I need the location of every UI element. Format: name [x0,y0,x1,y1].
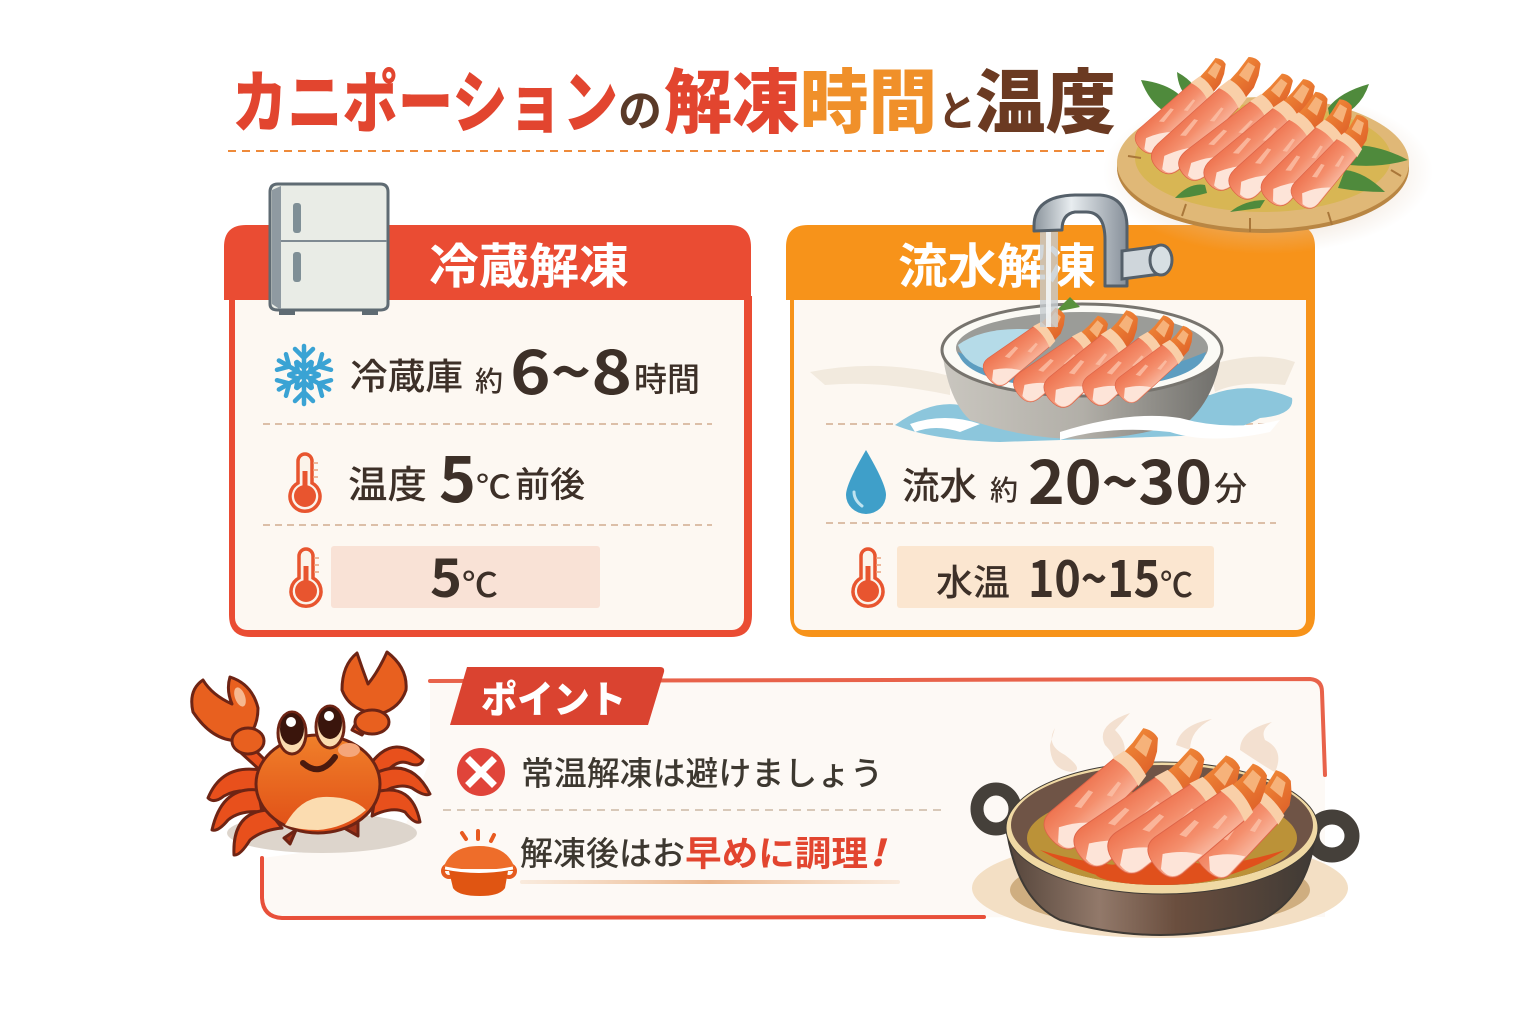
title [232,47,1116,148]
row: refrigerator time: 冷蔵庫 [350,348,463,400]
icon: thermometer [291,549,321,606]
row: running water time: 分 [1214,462,1247,510]
panel: refrigerator thawing [224,225,752,637]
title: 温度 [975,47,1116,148]
row: cook soon after thawing: 早めに調理 [685,826,868,877]
row: refrigerator temperature highlight: 5 [430,537,462,612]
row: refrigerator temperature: 5 [439,430,476,520]
row: avoid room temperature: 常温解凍は避けましょう [521,747,883,795]
illustration: crab in hot pan [972,713,1352,938]
panel: running water thawing [786,225,1315,637]
row: water temperature: ℃ [1160,558,1193,607]
row: cook soon after thawing: 解凍後はお [520,827,685,875]
row: water temperature: 水温 [936,554,1010,606]
plate rim segments [1128,156,1401,232]
icon: refrigerator [270,184,388,315]
row: cook soon after thawing [443,825,900,896]
row: refrigerator temperature [290,430,585,520]
title: と [938,78,976,139]
pan body [1007,832,1315,935]
heading: refrigerator thawing: 冷蔵解凍 [429,227,629,297]
row: refrigerator time: 時間 [634,353,700,401]
row: refrigerator time: 6~8 [510,325,632,412]
heading: running water thawing: 流水解凍 [898,227,1096,297]
row: refrigerator temperature: 温度 [348,454,427,509]
title: 解凍 [664,47,800,148]
row: running water time: 約 [990,469,1018,509]
title: 時間 [800,47,937,148]
row: cook soon after thawing: ! [870,825,888,877]
right claw [342,652,406,714]
row: refrigerator temperature: ℃ [476,462,511,508]
crab legs in bowl [978,297,1203,413]
left claw [192,677,258,741]
panel: point [262,667,1325,918]
illustration: crab on bamboo plate [1103,53,1433,254]
icon: water drop [846,450,886,514]
label: point tag: ポイント [481,669,626,724]
row: refrigerator temperature highlight [291,537,600,612]
leaves [1141,72,1408,212]
row: running water time [846,435,1247,522]
row: running water time: 流水 [902,456,977,510]
crab legs in pan [1037,723,1309,884]
row: running water time: 20~30 [1028,435,1212,522]
icon: snowflake [274,346,334,404]
illustration: crab mascot [192,652,430,855]
row: refrigerator temperature: 前後 [515,457,585,508]
icon: thermometer [853,549,883,606]
icon: cross [457,748,505,796]
icon: pot [443,831,515,896]
handles [977,789,1015,829]
shell [256,735,380,833]
label: point tag [450,667,664,725]
icon: faucet [1034,195,1172,327]
title: カニポーション [232,48,618,147]
row: refrigerator time [274,325,700,412]
underline [520,880,900,884]
steam [1050,713,1278,772]
row: water temperature [853,540,1214,612]
icon: thermometer [290,454,320,511]
row: water temperature: 10~15 [1028,540,1160,612]
title: の [618,75,662,139]
eyes [278,712,306,754]
illustration: bowl with crab under running water [810,297,1295,442]
crab legs on plate [1130,53,1382,214]
row: refrigerator time: 約 [475,360,503,400]
row: refrigerator temperature highlight: ℃ [462,558,498,607]
